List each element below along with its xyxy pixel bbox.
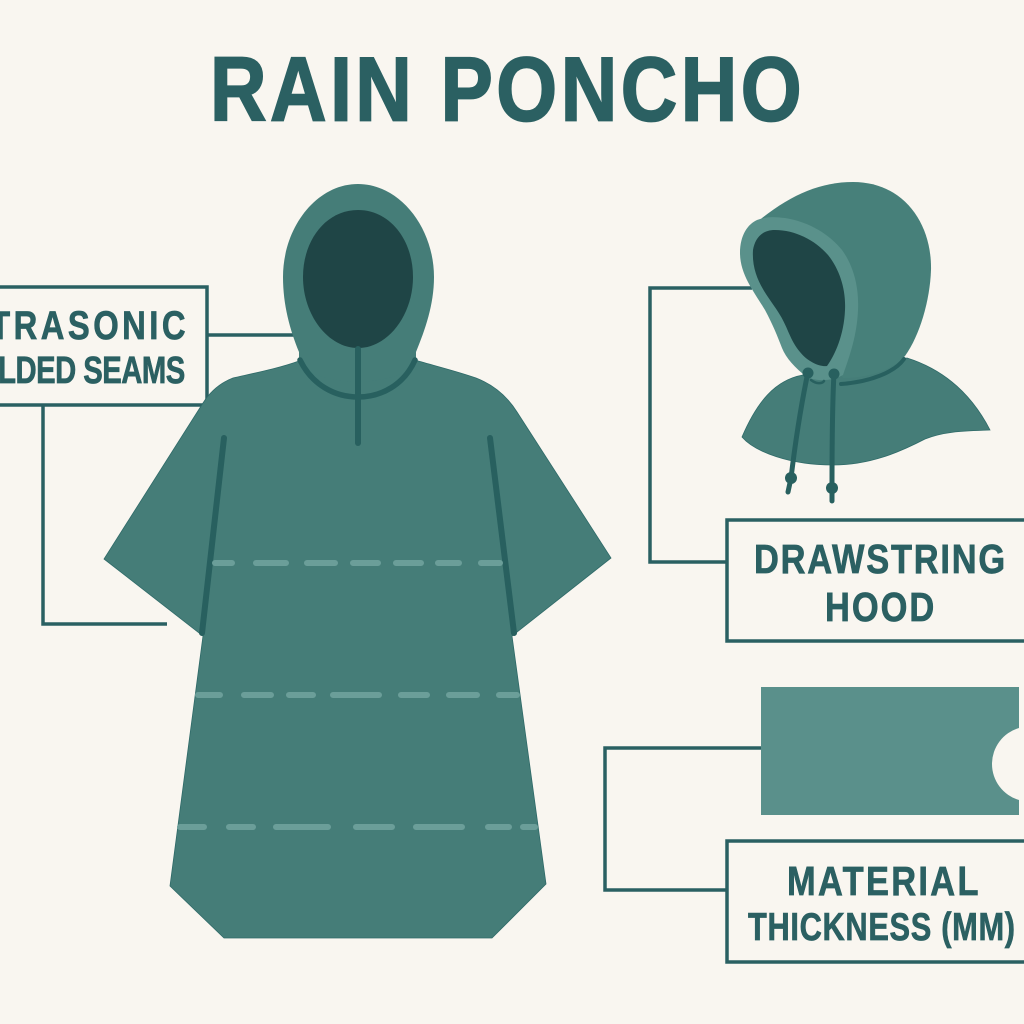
- drawstrings: [788, 372, 808, 492]
- callout: ultrasonic welded seams: [0, 287, 294, 624]
- collar seam: [300, 360, 415, 397]
- callout: material thickness: [605, 748, 1024, 962]
- poncho body: [104, 360, 611, 938]
- callout: drawstring hood: HOOD: [825, 585, 934, 631]
- hood: [283, 184, 434, 382]
- cape: [742, 358, 990, 465]
- stitched dashes: [215, 560, 500, 566]
- title: RAIN PONCHO: [210, 38, 802, 140]
- hood opening: [753, 230, 845, 366]
- cord ends: [802, 368, 814, 378]
- neck seam: [841, 359, 904, 384]
- hood rim: [740, 217, 858, 380]
- face opening: [303, 210, 413, 348]
- zipper: [355, 349, 361, 443]
- material swatch: [761, 687, 1019, 815]
- callout: material thickness: THICKNESS (MM): [748, 906, 1015, 949]
- chin seam: [811, 380, 824, 383]
- sleeve seams: [202, 438, 224, 633]
- callout: drawstring hood: [650, 288, 1024, 641]
- hood shell: [757, 182, 931, 378]
- callout: material thickness: MATERIAL: [787, 859, 979, 905]
- illustration: full poncho: [104, 184, 611, 938]
- illustration: hood detail: [740, 182, 990, 501]
- callout: drawstring hood: DRAWSTRING: [754, 537, 1005, 583]
